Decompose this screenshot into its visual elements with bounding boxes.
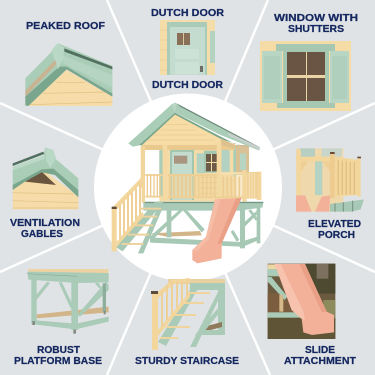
image: elevated porch — [296, 148, 364, 212]
panel: peaked roof — [25, 20, 112, 106]
panel: ventilation gables: GABLES — [21, 228, 63, 240]
window — [197, 153, 204, 173]
central white circle — [94, 94, 282, 282]
slide — [192, 198, 242, 263]
panel: robust platform base — [14, 269, 109, 367]
image: window with shutters — [260, 41, 351, 111]
panel: window with shutters — [260, 12, 358, 111]
back wall — [159, 147, 236, 202]
image: ventilation gables — [13, 147, 78, 209]
supports — [150, 231, 202, 237]
gable siding — [142, 114, 221, 145]
label: robust platform base: ROBUST — [37, 344, 81, 356]
front railing — [168, 175, 243, 197]
panel: window with shutters: SHUTTERS — [288, 23, 344, 35]
roof — [128, 103, 260, 151]
stair rail — [112, 176, 144, 211]
label: slide attachment: SLIDE — [305, 344, 335, 356]
panel: slide attachment — [268, 264, 357, 367]
image: sturdy staircase — [151, 278, 225, 350]
porch posts — [141, 146, 145, 188]
label: dutch door top: DUTCH DOOR — [151, 7, 224, 19]
panel: sturdy staircase — [135, 278, 239, 367]
label: ventilation gables: VENTILATION — [10, 217, 80, 229]
stairs — [116, 202, 165, 253]
label: sturdy staircase: STURDY STAIRCASE — [135, 355, 239, 367]
deck — [143, 202, 263, 211]
image: platform base — [27, 269, 109, 334]
door — [170, 149, 194, 200]
illustration: playhouse — [112, 103, 263, 263]
label: peaked roof: PEAKED ROOF — [26, 20, 106, 32]
image: peaked roof — [25, 43, 112, 106]
label: window with shutters: WINDOW WITH — [274, 12, 358, 24]
label: elevated porch: ELEVATED — [308, 218, 361, 230]
label: dutch door bottom: DUTCH DOOR — [152, 79, 223, 91]
panel: slide attachment: ATTACHMENT — [284, 355, 357, 367]
panel: elevated porch: PORCH — [318, 229, 355, 241]
panel: ventilation gables — [10, 147, 80, 240]
panel: elevated porch — [296, 148, 364, 241]
panel: dutch door — [151, 7, 224, 91]
panel: robust platform base: PLATFORM BASE — [14, 355, 102, 367]
image: slide attachment — [268, 264, 335, 339]
ceiling — [142, 143, 235, 150]
image: dutch door — [160, 20, 215, 75]
